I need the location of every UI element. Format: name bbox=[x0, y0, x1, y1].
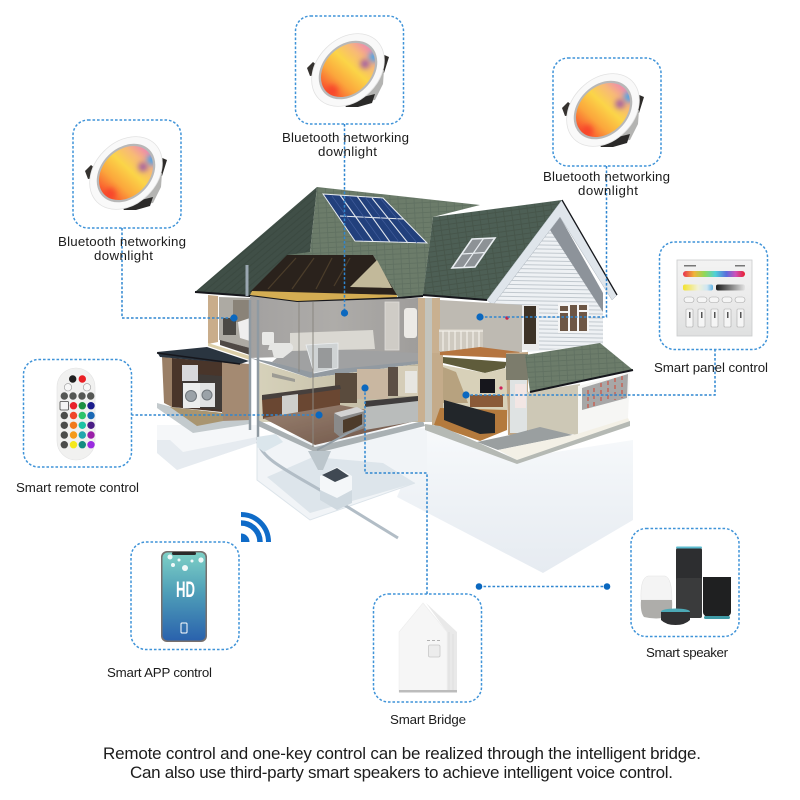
illustration: cutaway house bbox=[157, 187, 633, 573]
upper floor: bedroom bbox=[208, 295, 250, 360]
label: top downlight bbox=[282, 130, 409, 159]
label: smart app control: Smart APP control bbox=[107, 665, 212, 680]
connector: bridge to kitchen bbox=[361, 384, 427, 594]
label: smart panel control: Smart panel control bbox=[654, 360, 768, 375]
main hip roof bbox=[195, 187, 480, 302]
panel: smart app control bbox=[131, 542, 239, 650]
ground slab and basement shadows bbox=[157, 425, 633, 573]
label: right downlight: downlight bbox=[578, 183, 638, 198]
connector: panel to living room bbox=[462, 349, 715, 399]
panel: top downlight bbox=[296, 16, 404, 124]
panel: smart remote control bbox=[24, 360, 132, 467]
glass uprights and service pipes bbox=[247, 265, 398, 538]
caption bbox=[103, 744, 701, 782]
icon: bridge hub bbox=[399, 603, 457, 692]
icon: remote control bbox=[57, 368, 95, 460]
panel: smart panel control bbox=[660, 242, 768, 350]
upper floor: bathroom bbox=[250, 296, 418, 378]
label: smart bridge: Smart Bridge bbox=[390, 712, 466, 727]
central wall bbox=[418, 298, 443, 425]
label: smart speaker: Smart speaker bbox=[646, 645, 729, 660]
label: right downlight: Bluetooth networking bbox=[543, 169, 670, 184]
icon: right downlight bbox=[552, 59, 654, 161]
connector: bridge to speaker bbox=[476, 583, 610, 590]
connector: right downlight to nursery bbox=[476, 166, 606, 321]
label: top downlight: downlight bbox=[318, 144, 377, 159]
solar panel bbox=[323, 194, 427, 243]
label: top downlight: Bluetooth networking bbox=[282, 130, 409, 145]
connector: left downlight to bedroom bbox=[122, 228, 238, 322]
panel: smart bridge bbox=[374, 594, 482, 702]
label: left downlight: downlight bbox=[94, 248, 153, 263]
label: left downlight: Bluetooth networking bbox=[58, 234, 186, 249]
caption: Can also use third-party smart speakers to achieve intelligent voice control. bbox=[130, 763, 673, 782]
icon: left downlight bbox=[75, 122, 177, 224]
connector: top downlight to bathroom bbox=[341, 124, 348, 317]
panel: right downlight bbox=[552, 58, 661, 166]
icon: top downlight bbox=[297, 19, 399, 121]
right roof with skylight bbox=[423, 200, 562, 300]
septic tank bbox=[308, 451, 352, 510]
laundry annex bbox=[157, 347, 250, 433]
lower floor: living room bbox=[434, 352, 528, 441]
panel: smart speaker bbox=[631, 528, 739, 636]
icon: smartphone: HD bbox=[176, 577, 195, 602]
gable siding bbox=[487, 200, 617, 352]
garage bbox=[425, 343, 633, 464]
connector: remote to kitchen bbox=[131, 411, 323, 419]
icon: wall touch panel bbox=[677, 260, 752, 336]
icon: speakers bbox=[641, 546, 731, 625]
label: right downlight bbox=[543, 169, 670, 198]
panel: left downlight bbox=[73, 120, 181, 228]
label: smart remote control: Smart remote control bbox=[16, 480, 139, 495]
label: left downlight bbox=[58, 234, 186, 263]
icon: wifi signal bbox=[241, 514, 268, 542]
caption: Remote control and one-key control can be realized through the intelligent bridge. bbox=[103, 744, 701, 763]
upper floor: nursery bbox=[439, 300, 539, 373]
lower floor: kitchen bbox=[258, 362, 425, 453]
